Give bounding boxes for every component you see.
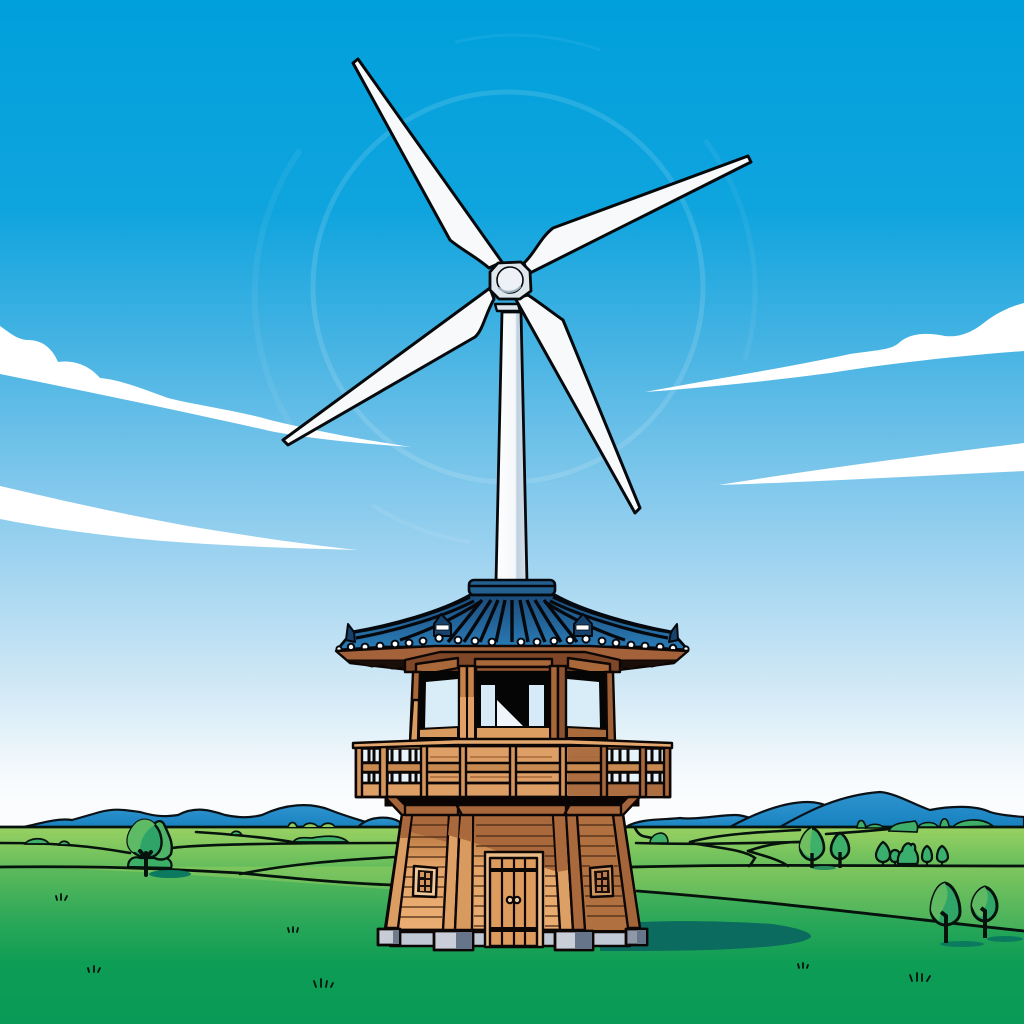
lower body bbox=[378, 797, 647, 950]
stone block far right bbox=[626, 929, 647, 945]
grass tufts bbox=[56, 894, 930, 987]
wall shadow left bbox=[410, 815, 450, 842]
trees: small row bbox=[876, 842, 948, 865]
wall siding lines bbox=[394, 825, 625, 926]
mast collar bbox=[495, 304, 520, 311]
field lines bbox=[0, 827, 1024, 931]
balcony shaded right part bbox=[568, 747, 669, 796]
door handles bbox=[507, 897, 513, 903]
top beam bbox=[405, 805, 621, 815]
balcony middle rail bbox=[358, 763, 668, 772]
cloud: upper left bbox=[0, 326, 411, 447]
wall bbox=[385, 815, 640, 930]
balcony lower boundary bbox=[358, 782, 668, 784]
window right bbox=[590, 866, 613, 897]
tree: left cluster bbox=[128, 820, 191, 878]
cloud: upper right bbox=[645, 303, 1024, 392]
window center right bbox=[529, 685, 544, 727]
dark band under balcony bbox=[385, 797, 639, 806]
light triangle bbox=[497, 700, 523, 726]
balcony top rail bbox=[353, 739, 672, 748]
outer and inner columns bbox=[386, 815, 412, 928]
trees: front right bbox=[931, 883, 1023, 947]
stone block far left bbox=[378, 929, 400, 945]
ground: middle field bbox=[0, 866, 1024, 935]
hub shading bbox=[499, 287, 520, 292]
wall shadow center bbox=[472, 815, 558, 872]
blade: lower right bbox=[515, 295, 640, 513]
window left bbox=[413, 866, 437, 897]
roof cap bbox=[469, 580, 555, 595]
stone block center right bbox=[555, 931, 593, 950]
window center left bbox=[481, 685, 495, 727]
bushes: left bbox=[25, 822, 348, 845]
door bbox=[485, 852, 543, 947]
balcony bbox=[353, 739, 672, 797]
mountains: left bbox=[24, 805, 400, 828]
ground: far field bbox=[0, 827, 1024, 869]
cloud: lower left bbox=[0, 486, 358, 550]
blade: upper left bbox=[353, 59, 502, 268]
eaves and brackets bbox=[336, 646, 688, 676]
wall shadow right bbox=[577, 815, 627, 930]
window right bbox=[567, 679, 600, 728]
balcony body bbox=[356, 746, 670, 797]
upper storey openings bbox=[416, 671, 612, 741]
balcony side openings bbox=[361, 749, 665, 783]
trees: mid right bbox=[800, 828, 849, 870]
roof eave tile dots bbox=[336, 634, 689, 652]
mountains: right bbox=[626, 792, 1024, 828]
ground shadow: tower bbox=[600, 921, 811, 951]
upper posts bbox=[410, 666, 615, 742]
corner brackets bbox=[385, 797, 640, 815]
stone foundation bbox=[390, 932, 630, 946]
balcony posts bbox=[356, 746, 670, 797]
window left bbox=[425, 679, 458, 728]
hub housing bbox=[490, 262, 531, 299]
blade: right bbox=[524, 156, 751, 274]
blade: lower left bbox=[283, 288, 494, 445]
tower mast bbox=[496, 312, 527, 582]
ground: near field bbox=[0, 867, 1024, 1024]
lower sill rails bbox=[419, 727, 607, 739]
side windows bbox=[413, 866, 613, 897]
bushes: right horizon bbox=[650, 819, 993, 843]
hub nose bbox=[497, 267, 523, 293]
rotation rings bbox=[255, 35, 755, 542]
turbine rotor bbox=[283, 59, 751, 513]
cloud: lower right bbox=[719, 443, 1024, 485]
tiled roof bbox=[337, 595, 688, 650]
stone block center left bbox=[434, 931, 473, 950]
roof ridge ornaments bbox=[434, 614, 451, 636]
